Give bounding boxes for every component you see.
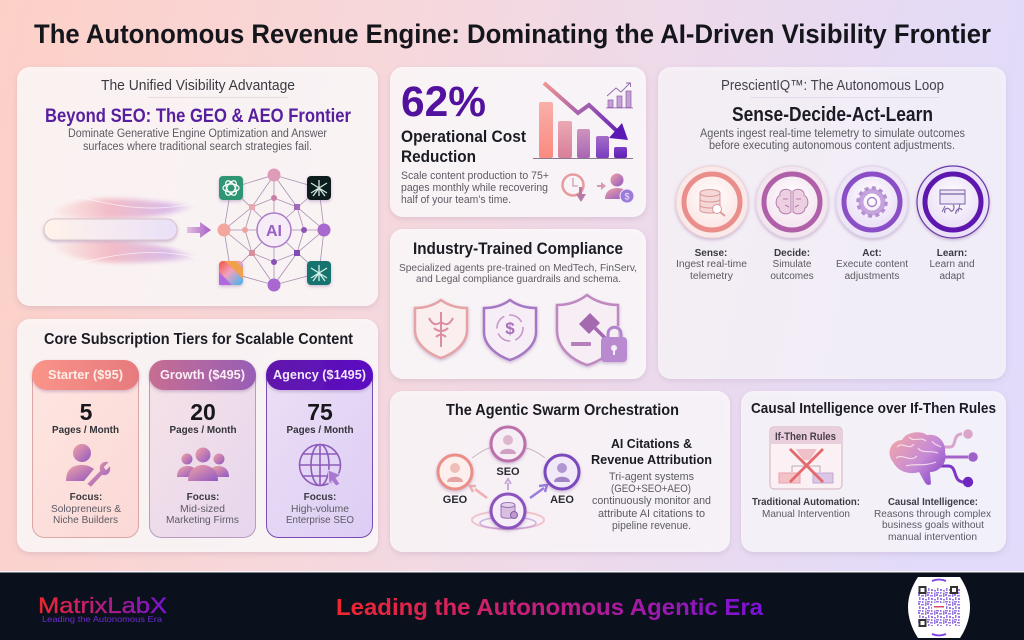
step: sense	[676, 166, 748, 282]
description: Specialized agents pre-trained on MedTech, FinServ,	[399, 262, 637, 274]
big statistic: 62%	[401, 78, 486, 126]
step: learn: Learn:	[937, 248, 967, 259]
description: and Legal compliance guardrails and schema.	[416, 273, 621, 285]
icon: green chat assistant	[219, 176, 243, 200]
swarm diagram	[438, 427, 579, 529]
tier: starter	[32, 360, 139, 538]
tier: growth: Growth ($495)	[160, 368, 245, 382]
description: Scale content production to 75+	[401, 170, 549, 182]
statistic heading	[401, 127, 526, 166]
tier: starter: Pages / Month	[52, 424, 119, 436]
attribution description: pipeline revenue.	[612, 520, 691, 532]
icon: clock to saved person	[562, 174, 634, 203]
panel: operational cost reduction	[390, 67, 646, 217]
search bar	[44, 219, 177, 240]
icon: globe with cursor	[300, 444, 341, 486]
tier: agency	[266, 360, 373, 538]
attribution description: Tri-agent systems	[609, 471, 694, 483]
attribution heading	[591, 436, 712, 467]
logo wordmark	[38, 593, 167, 624]
agent labels: GEO	[443, 494, 468, 506]
step: act: adjustments	[844, 271, 900, 282]
step: sense: Ingest real-time	[676, 259, 747, 270]
eyebrow heading: PrescientIQ™: The Autonomous Loop	[721, 78, 944, 94]
icon: finance shield	[484, 300, 536, 360]
traditional automation text: Manual Intervention	[762, 508, 850, 520]
panel eyebrow heading: The Unified Visibility Advantage	[101, 78, 295, 94]
tier: growth: 20	[190, 399, 216, 425]
panel: core subscription tiers	[17, 319, 378, 552]
tier: starter: Solopreneurs &	[51, 504, 121, 515]
if-then rules crossed-out diagram	[770, 427, 842, 489]
icon: gear	[858, 188, 886, 216]
description	[68, 128, 327, 153]
description: Agents ingest real-time telemetry to simulate outcomes	[700, 128, 965, 140]
icon: dark assistant	[307, 176, 331, 200]
agent labels: AEO	[550, 494, 574, 506]
tier: growth: Mid-sized	[180, 504, 225, 515]
heading: Sense-Decide-Act-Learn	[732, 104, 933, 126]
light swooshes around search bar	[52, 196, 200, 264]
heading: Core Subscription Tiers for Scalable Content	[44, 331, 354, 348]
step: sense: Sense:	[695, 248, 727, 259]
step: act	[836, 166, 908, 282]
heading: The Agentic Swarm Orchestration	[446, 402, 679, 419]
icon: brain	[776, 189, 808, 214]
icon: finance shield: $	[505, 319, 515, 338]
agent labels: SEO	[496, 466, 520, 478]
step: sense: telemetry	[690, 271, 733, 282]
icon: medical shield	[415, 300, 467, 358]
agent node: SEO	[491, 427, 525, 461]
description	[399, 262, 637, 285]
agent node: AEO	[545, 455, 579, 489]
logo wordmark: Leading the Autonomous Era	[42, 614, 162, 624]
tier: agency: Pages / Month	[286, 424, 354, 436]
tier: starter: Focus:	[70, 492, 102, 503]
step: learn	[917, 166, 989, 282]
tier: growth: Pages / Month	[170, 424, 236, 436]
icon: clock to saved person: $	[624, 192, 630, 202]
description: half of your team’s time.	[401, 194, 511, 206]
step: decide	[756, 166, 828, 282]
icon: mini rising chart	[606, 83, 633, 108]
icon: window with data swirl	[940, 190, 965, 214]
attribution heading: Revenue Attribution	[591, 452, 712, 467]
tier: agency: Agency ($1495)	[273, 368, 366, 382]
icon: legal shield with lock	[557, 295, 627, 365]
agent node: central database	[491, 494, 525, 528]
attribution description: attribute AI citations to	[598, 508, 705, 520]
attribution description: (GEO+SEO+AEO)	[611, 483, 691, 495]
AI core circle: AI	[266, 223, 282, 240]
swarm base rings	[472, 511, 544, 529]
attribution description: continuously monitor and	[592, 495, 711, 507]
tier: starter: 5	[80, 399, 93, 425]
panel: causal intelligence	[741, 391, 1006, 552]
tier: starter: Starter ($95)	[48, 368, 123, 382]
causal brain with connectors	[890, 429, 978, 487]
tier: growth: Marketing Firms	[166, 515, 239, 526]
tier: agency: 75	[307, 399, 333, 425]
tier: growth	[149, 360, 256, 538]
attribution heading: AI Citations &	[611, 436, 692, 451]
icon: team of three	[177, 448, 229, 481]
panel: unified visibility advantage	[17, 67, 378, 306]
causal intelligence text: Reasons through complex	[874, 508, 992, 520]
description: surfaces where traditional search strategies fail.	[83, 141, 312, 153]
footer tagline: Leading the Autonomous Agentic Era	[336, 594, 763, 620]
icon: database search	[700, 190, 725, 216]
causal intelligence text	[874, 496, 992, 543]
description: pages monthly while recovering	[401, 182, 548, 194]
description: before executing autonomous content adjustments.	[709, 140, 955, 152]
title: The Autonomous Revenue Engine: Dominating the AI-Driven Visibility Frontier	[34, 19, 991, 49]
heading: Causal Intelligence over If-Then Rules	[751, 400, 996, 417]
agent node: GEO	[438, 455, 472, 489]
panel: industry-trained compliance	[390, 229, 646, 379]
step: learn: adapt	[939, 271, 965, 282]
traditional automation text	[752, 496, 860, 520]
footer band	[0, 571, 1024, 640]
description: Dominate Generative Engine Optimization and Answer	[68, 128, 327, 140]
causal intelligence text: business goals without	[882, 519, 984, 531]
statistic heading: Reduction	[401, 147, 476, 166]
tier: growth: Focus:	[187, 492, 219, 503]
panel: autonomous loop	[658, 67, 1006, 379]
icon: teal assistant	[307, 261, 331, 285]
causal intelligence text: manual intervention	[888, 531, 977, 543]
heading: Industry-Trained Compliance	[413, 240, 623, 258]
attribution description	[592, 471, 711, 532]
icon: person with wrench	[66, 444, 110, 487]
step: act: Act:	[862, 248, 882, 259]
step: decide: Decide:	[774, 248, 810, 259]
purple heading: Beyond SEO: The GEO & AEO Frontier	[45, 106, 352, 127]
icon: colourful assistant	[219, 261, 243, 285]
description	[401, 170, 549, 206]
logo wordmark: MatrixLabX	[38, 593, 167, 618]
step: act: Execute content	[836, 259, 908, 270]
tier: agency: High-volume	[291, 504, 349, 515]
arrow to AI network	[187, 222, 211, 238]
tier: starter: Niche Builders	[53, 515, 118, 526]
panel: agentic swarm orchestration	[390, 391, 730, 552]
agent labels	[443, 466, 574, 506]
step: decide: outcomes	[770, 271, 814, 282]
causal intelligence text: Causal Intelligence:	[888, 496, 978, 508]
tier: agency: Focus:	[304, 492, 336, 503]
step: decide: Simulate	[773, 259, 812, 270]
step: learn: Learn and	[929, 259, 975, 270]
traditional automation text: Traditional Automation:	[752, 496, 860, 508]
tier: agency: Enterprise SEO	[286, 515, 354, 526]
statistic heading: Operational Cost	[401, 127, 526, 146]
QR code	[908, 577, 970, 638]
description	[700, 128, 965, 152]
AI network diagram	[218, 168, 331, 292]
declining bar chart	[533, 83, 633, 159]
flow arrows	[470, 479, 547, 498]
if-then rules crossed-out diagram: If-Then Rules	[775, 431, 836, 443]
